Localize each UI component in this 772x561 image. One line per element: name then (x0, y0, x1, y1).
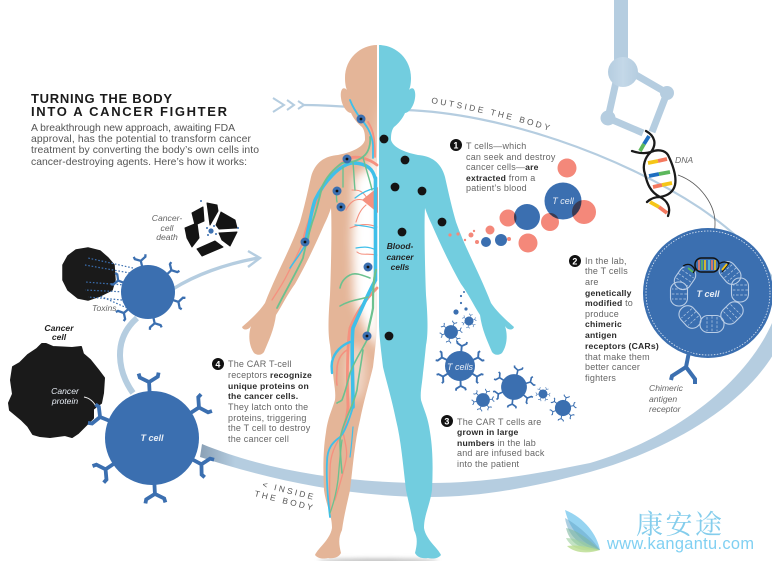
label: blood-cancer cells (386, 241, 414, 272)
step 1 text (450, 139, 556, 193)
watermark logo (565, 503, 754, 553)
step 1 text: extracted from a (466, 173, 535, 183)
DNA helix (632, 131, 675, 216)
step 3 text: grown in large (457, 427, 519, 437)
veins: green (277, 137, 376, 513)
large cancer cell (9, 344, 104, 437)
step 1 text: can seek and destroy (466, 152, 556, 162)
step 4 text: receptors recognize (228, 370, 312, 380)
step 3 cells: T cells (447, 362, 473, 372)
step 2 text: the T cells (585, 266, 628, 276)
body: circulatory half (242, 45, 380, 559)
title: INTO A CANCER FIGHTER (31, 104, 228, 119)
label: chimeric antigen receptor (649, 383, 684, 414)
label: cancer protein: protein (51, 396, 78, 406)
label: blood-cancer cells: cancer (386, 252, 414, 262)
step 1 text: cancer cells—are (466, 162, 539, 172)
arrow: cancer protein (84, 397, 97, 408)
robot arm (600, 0, 674, 133)
step 2 text: In the lab, (585, 256, 627, 266)
step 4 text: 4 (215, 360, 221, 370)
intro text: cancer-destroying agents. Here’s how it works: (31, 157, 247, 168)
engineered T cell (643, 228, 772, 384)
body: blue half (379, 45, 514, 559)
large T cell (88, 373, 214, 503)
small T cell (111, 254, 185, 330)
blood-cancer cells (380, 135, 446, 340)
label: cancer-cell death: Cancer- (152, 213, 182, 223)
step 2 text: fighters (585, 373, 616, 383)
small cancer cell (63, 248, 115, 300)
step 2 text: antigen (585, 330, 617, 340)
step 3 cells (436, 291, 579, 424)
step 2 text: that make them (585, 352, 650, 362)
label: cancer protein: Cancer (51, 386, 80, 396)
label: cancer cell: cell (52, 332, 67, 342)
label: outside the body (432, 98, 550, 130)
large T cell: T cell (140, 433, 164, 443)
label: inside the body: THE BODY (254, 488, 316, 513)
title: TURNING THE BODY (31, 91, 172, 106)
step 4 text: the cancer cell (228, 434, 289, 444)
cancer-cell death burst (185, 200, 239, 256)
step 2 text: better cancer (585, 362, 640, 372)
step 1 cells (448, 158, 596, 252)
step 2 text (569, 255, 659, 383)
veins: blue (290, 100, 376, 517)
step 1 text: patient’s blood (466, 183, 527, 193)
label: cancer-cell death: cell (161, 223, 175, 233)
intro text: approval, has the potential to transform cancer (31, 134, 252, 145)
step 4 text: They latch onto the (228, 402, 308, 412)
step 4 text: unique proteins on (228, 381, 309, 391)
title (31, 91, 228, 119)
label: blood-cancer cells: Blood- (387, 241, 413, 251)
label: toxins: Toxins (92, 303, 117, 313)
label: chimeric antigen receptor: Chimeric (649, 383, 684, 393)
label: blood-cancer cells: cells (391, 262, 410, 272)
step 4 text: proteins, triggering (228, 413, 307, 423)
step 3 text: numbers in the lab (457, 438, 536, 448)
arrow: DNA into T cell (678, 175, 715, 250)
intro text: treatment by converting the body’s own cells into (31, 145, 259, 156)
intro text (31, 123, 259, 168)
lymph nodes (300, 114, 372, 340)
step 4 text (212, 358, 312, 444)
step 2 text: produce (585, 309, 619, 319)
wing icon (565, 510, 600, 552)
watermark logo: 康安途 (636, 503, 724, 542)
chromosome ring (670, 258, 748, 332)
label: inside the body: < INSIDE (262, 479, 317, 502)
step 3 text: and are infused back (457, 448, 545, 458)
engineered T cell: T cell (696, 289, 720, 299)
step 2 text: chimeric (585, 319, 622, 329)
step 2 text: genetically (585, 288, 632, 298)
watermark logo: www.kangantu.com (606, 535, 754, 553)
step 2 text: modified to (585, 298, 633, 308)
arrow: chevrons into ring (273, 98, 304, 112)
step 1 cells: T cell (552, 196, 575, 206)
receptor (671, 352, 695, 384)
step 2 text: 2 (572, 256, 578, 266)
label: chimeric antigen receptor: antigen (649, 394, 677, 404)
label: DNA: DNA (675, 155, 693, 165)
step 4 text: The CAR T-cell (228, 359, 292, 369)
step 3 text (441, 415, 545, 469)
label: cancer-cell death: death (156, 232, 178, 242)
label: cancer cell: Cancer (44, 323, 74, 333)
intro text: A breakthrough new approach, awaiting FDA (31, 123, 235, 134)
step 4 text: the T cell to destroy (228, 423, 311, 433)
label: chimeric antigen receptor: receptor (649, 404, 682, 414)
step 3 text: The CAR T cells are (457, 417, 542, 427)
step 1 text: 1 (453, 140, 459, 150)
step 2 text: receptors (CARs) (585, 341, 659, 351)
label: cancer-cell death (152, 213, 182, 242)
veins: salmon (272, 122, 378, 512)
step 4 text: the cancer cells. (228, 391, 298, 401)
process ring (120, 105, 772, 497)
step 3 text: into the patient (457, 459, 520, 469)
step 2 text: are (585, 277, 599, 287)
label: cancer cell (44, 323, 74, 342)
label: cancer protein (51, 386, 80, 406)
toxins (85, 258, 133, 308)
step 3 text: 3 (444, 416, 450, 426)
arrow: return to body (248, 251, 260, 267)
inserted DNA (683, 258, 729, 273)
floor shadow (318, 558, 438, 561)
step 1 text: T cells—which (466, 141, 526, 151)
